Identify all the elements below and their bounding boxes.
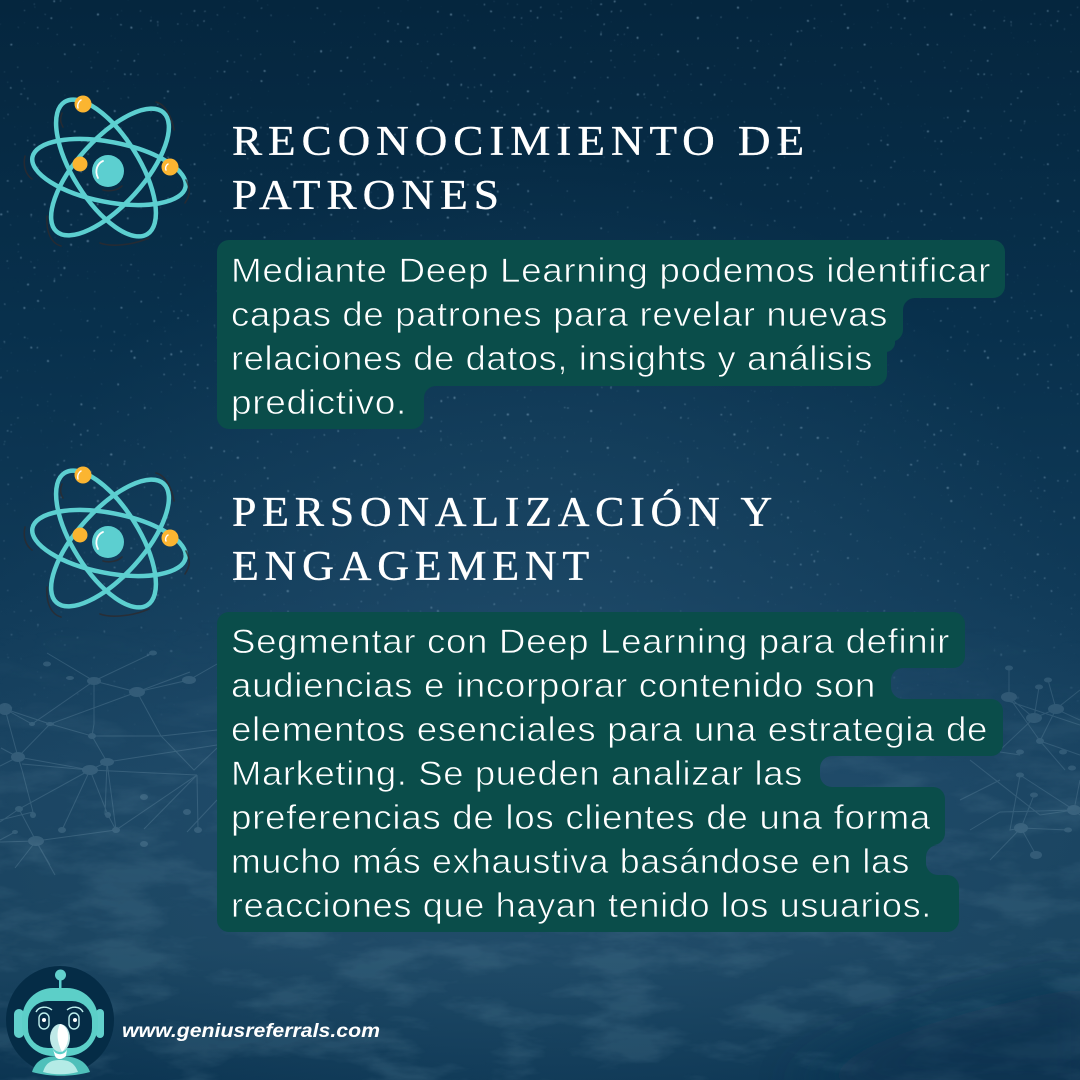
text block: segmentar con deep learning <box>231 623 988 925</box>
panel: text highlight 1 <box>217 240 1005 429</box>
heading: personalización y engagement: PERSONALIZACIÓN Y <box>232 489 778 536</box>
text block: segmentar con deep learning: Segmentar con Deep Learning para definir <box>231 623 950 661</box>
network graphic: left <box>0 650 217 875</box>
network graphic: right <box>960 666 1080 860</box>
text block: segmentar con deep learning: reacciones que hayan tenido los usuarios. <box>231 887 932 925</box>
website url: www.geniusreferrals.com <box>122 1021 380 1042</box>
text block: mediante deep learning: Mediante Deep Learning podemos identificar <box>231 252 991 290</box>
heading: reconocimiento de patrones: RECONOCIMIENTO DE <box>232 119 810 165</box>
icon: atom 2 <box>24 455 191 625</box>
text block: mediante deep learning: predictivo. <box>231 384 407 422</box>
icon: atom 1 <box>24 84 191 254</box>
text block: segmentar con deep learning: elementos esenciales para una estrategia de <box>231 711 988 749</box>
text block: mediante deep learning: capas de patrones para revelar nuevas <box>231 296 888 334</box>
heading: personalización y engagement <box>232 489 778 590</box>
panel: text highlight 2 <box>217 612 1003 932</box>
text block: segmentar con deep learning: Marketing. Se pueden analizar las <box>231 755 803 793</box>
text block: segmentar con deep learning: audiencias e incorporar contenido son <box>231 667 876 705</box>
text block: mediante deep learning <box>231 252 991 422</box>
heading: reconocimiento de patrones <box>232 119 810 219</box>
text block: segmentar con deep learning: preferencias de los clientes de una forma <box>231 799 931 837</box>
icon: robot koala mascot <box>6 966 114 1076</box>
heading: personalización y engagement: ENGAGEMENT <box>232 544 595 590</box>
heading: reconocimiento de patrones: PATRONES <box>232 173 505 219</box>
text block: segmentar con deep learning: mucho más exhaustiva basándose en las <box>231 843 910 881</box>
text block: mediante deep learning: relaciones de datos, insights y análisis <box>231 340 873 378</box>
